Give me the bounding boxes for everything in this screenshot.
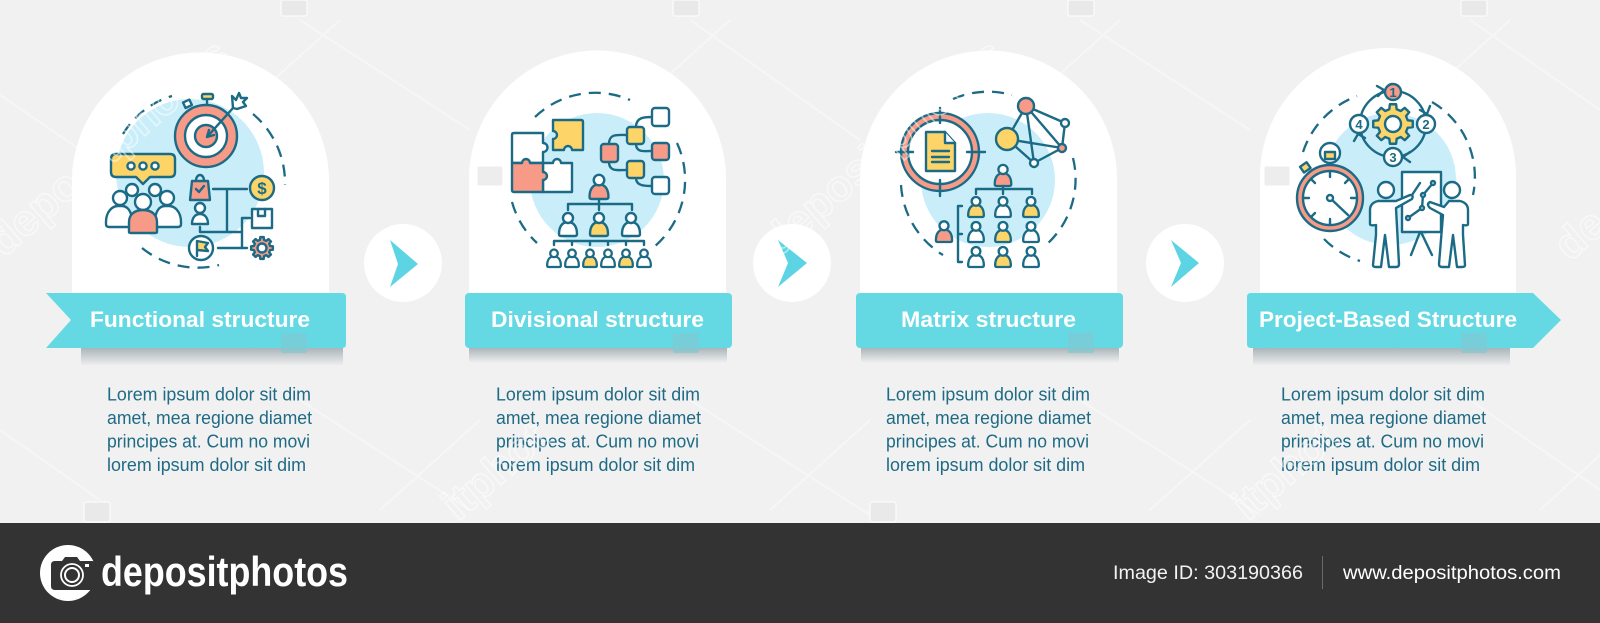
icon: project-based structure: 1 — [1389, 85, 1397, 100]
icon: project-based structure: 4 — [1355, 117, 1363, 132]
arrow 3 — [1146, 224, 1224, 302]
body text: principes at. Cum no movi — [886, 432, 1089, 452]
arrow 2 — [753, 224, 831, 302]
arch card — [860, 50, 1117, 295]
arch card — [469, 50, 726, 295]
ribbon — [856, 293, 1123, 348]
icon: project-based structure — [1297, 84, 1475, 267]
body text: amet, mea regione diamet — [886, 408, 1091, 428]
body text: lorem ipsum dolor sit dim — [107, 455, 306, 475]
body text — [1281, 384, 1486, 475]
body text: principes at. Cum no movi — [496, 432, 699, 452]
logo — [40, 545, 348, 601]
panel: project-based structure — [1247, 48, 1561, 475]
body text: principes at. Cum no movi — [1281, 432, 1484, 452]
watermark lines — [0, 20, 1600, 515]
ribbon shadow — [81, 348, 343, 366]
body text: Lorem ipsum dolor sit dim — [496, 384, 700, 404]
body text: lorem ipsum dolor sit dim — [496, 455, 695, 475]
icon: functional structure: $ — [257, 179, 267, 198]
logo: depositphotos — [101, 548, 348, 595]
body text: lorem ipsum dolor sit dim — [886, 455, 1085, 475]
body text — [886, 384, 1091, 475]
arrow 1 — [364, 224, 442, 302]
site url: www.depositphotos.com — [1342, 562, 1561, 584]
body text: Lorem ipsum dolor sit dim — [107, 384, 311, 404]
heading: Functional structure — [90, 307, 310, 332]
panel: divisional structure — [465, 50, 732, 475]
image id: Image ID: 303190366 — [1113, 562, 1303, 584]
ribbon shadow — [861, 348, 1119, 363]
body text: Lorem ipsum dolor sit dim — [886, 384, 1090, 404]
ribbon — [1247, 293, 1561, 348]
body text — [496, 384, 701, 475]
icon: functional structure — [106, 93, 285, 268]
icon: divisional structure — [512, 93, 685, 267]
panel: functional structure — [46, 52, 346, 475]
ribbon — [46, 293, 346, 348]
arch card — [72, 52, 329, 295]
heading: Matrix structure — [901, 307, 1076, 332]
body text: Lorem ipsum dolor sit dim — [1281, 384, 1485, 404]
body text: lorem ipsum dolor sit dim — [1281, 455, 1480, 475]
ribbon — [465, 293, 732, 348]
icon: matrix structure — [896, 92, 1076, 267]
watermark text: itphot — [1222, 412, 1347, 530]
body text — [107, 384, 312, 475]
watermark camera stamps — [84, 0, 1487, 522]
heading: Divisional structure — [491, 307, 704, 332]
panel: matrix structure — [856, 50, 1123, 475]
watermark text: depositphotos — [752, 30, 1013, 266]
watermark text: itphot — [432, 412, 557, 530]
body text: principes at. Cum no movi — [107, 432, 310, 452]
body text: amet, mea regione diamet — [496, 408, 701, 428]
icon: project-based structure: 2 — [1422, 117, 1430, 132]
ribbon shadow — [1253, 348, 1510, 366]
body text: amet, mea regione diamet — [107, 408, 312, 428]
body text: amet, mea regione diamet — [1281, 408, 1486, 428]
heading: Project-Based Structure — [1259, 307, 1517, 332]
arch card — [1260, 48, 1516, 295]
footer band — [0, 523, 1600, 623]
ribbon shadow — [469, 348, 727, 363]
icon: project-based structure: 3 — [1389, 150, 1397, 165]
